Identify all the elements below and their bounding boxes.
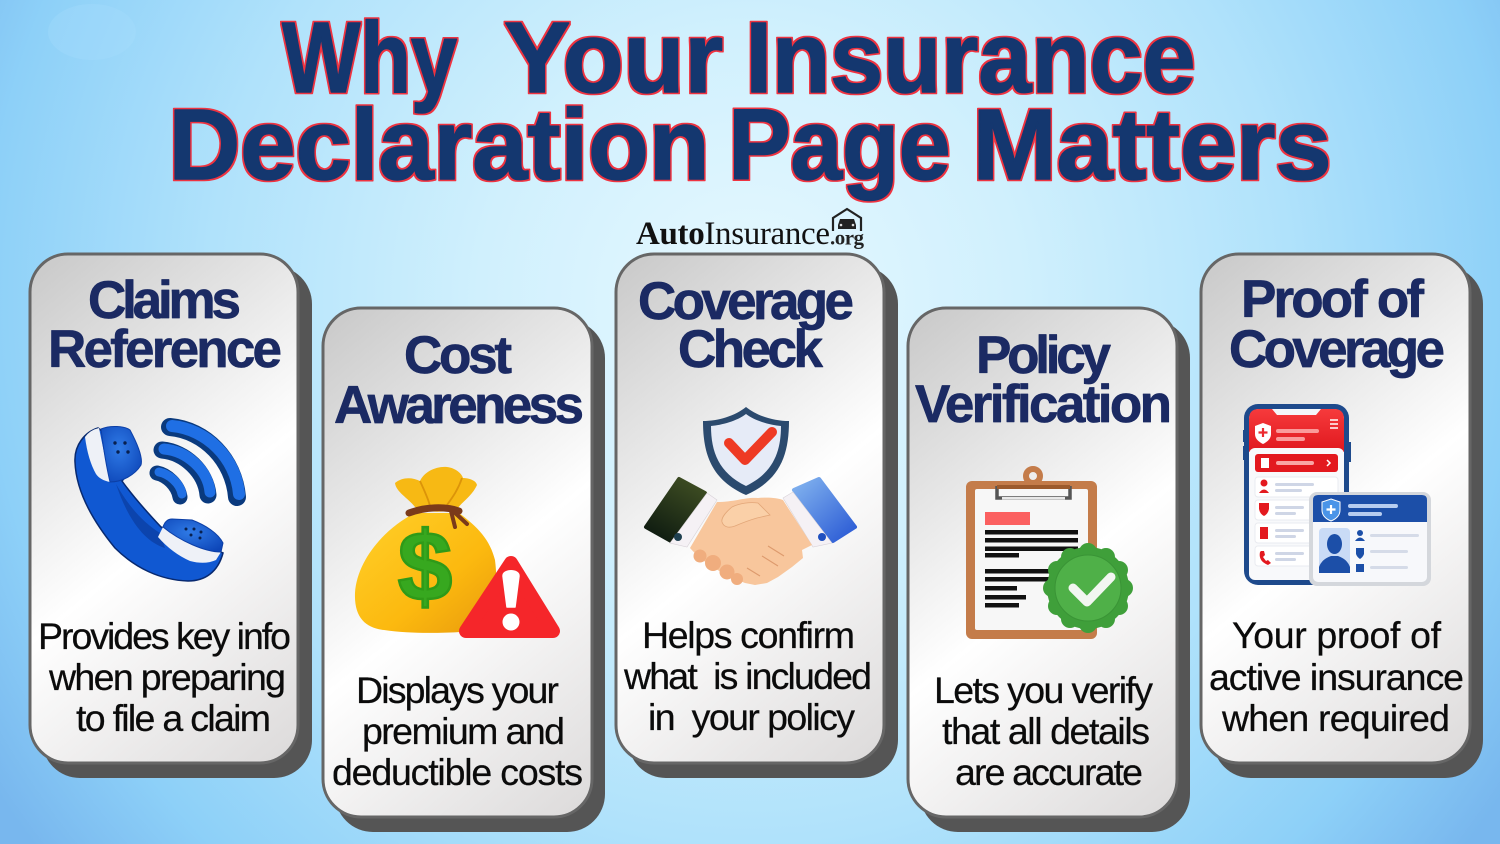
title <box>168 2 1332 201</box>
body text: policy verification: are accurate <box>955 751 1143 793</box>
heading: proof of coverage: Proof of <box>1241 270 1424 329</box>
body text: coverage check: Helps confirm <box>642 614 855 656</box>
body text: coverage check: in your policy <box>648 696 855 738</box>
logo: AutoInsurance.org: .org <box>830 226 864 250</box>
heading: claims reference <box>48 271 282 379</box>
title: Insurance <box>746 2 1196 114</box>
heading: policy verification <box>915 326 1172 434</box>
title: Page <box>728 89 950 201</box>
icon: telephone with signal <box>75 426 239 581</box>
title: Declaration <box>168 89 710 201</box>
heading: coverage check: Check <box>678 320 824 379</box>
body text: policy verification: Lets you verify <box>934 669 1153 711</box>
panel: coverage check <box>616 254 898 778</box>
body text: cost awareness: Displays your <box>356 669 559 711</box>
body text: proof of coverage: when required <box>1221 697 1450 739</box>
icon: clipboard with green approval badge <box>966 469 1133 639</box>
icon: money bag with warning triangle <box>355 467 553 633</box>
body text: claims reference: to file a claim <box>76 697 271 739</box>
body text: claims reference: when preparing <box>48 656 286 698</box>
body text: cost awareness: deductible costs <box>332 751 583 793</box>
body text: cost awareness: premium and <box>362 710 565 752</box>
heading: proof of coverage <box>1229 270 1445 379</box>
icon: money bag with warning triangle: $ <box>398 511 452 621</box>
heading: cost awareness: Awareness <box>334 376 584 435</box>
body text: proof of coverage <box>1209 614 1464 739</box>
icon: insurance app phone and id card <box>1243 404 1431 586</box>
body text: claims reference: Provides key info <box>38 615 291 657</box>
panel: claims reference <box>30 254 312 778</box>
body text: proof of coverage: active insurance <box>1209 656 1464 698</box>
heading: cost awareness: Cost <box>404 326 512 385</box>
body text: claims reference <box>38 615 291 739</box>
body text: coverage check <box>623 614 872 738</box>
title: Your <box>504 2 723 114</box>
heading: claims reference: Reference <box>48 320 282 379</box>
panel: cost awareness <box>323 308 605 832</box>
heading: claims reference: Claims <box>88 271 241 330</box>
title: Why <box>282 2 457 114</box>
heading: policy verification: Verification <box>915 375 1172 434</box>
heading: coverage check <box>638 272 854 379</box>
panel: proof of coverage <box>1201 254 1483 778</box>
heading: cost awareness <box>334 326 584 435</box>
logo: AutoInsurance.org: AutoInsurance <box>636 216 830 252</box>
heading: proof of coverage: Coverage <box>1229 320 1445 379</box>
heading: policy verification: Policy <box>976 326 1112 385</box>
panel: policy verification <box>908 308 1190 832</box>
icon: shield with check over handshake <box>646 407 855 585</box>
title: Matters <box>972 89 1332 201</box>
body text: proof of coverage: Your proof of <box>1232 614 1442 656</box>
body text: cost awareness <box>332 669 583 793</box>
body text: policy verification: that all details <box>942 710 1150 752</box>
body text: policy verification <box>934 669 1153 793</box>
body text: coverage check: what is included <box>623 655 872 697</box>
heading: coverage check: Coverage <box>638 272 854 331</box>
